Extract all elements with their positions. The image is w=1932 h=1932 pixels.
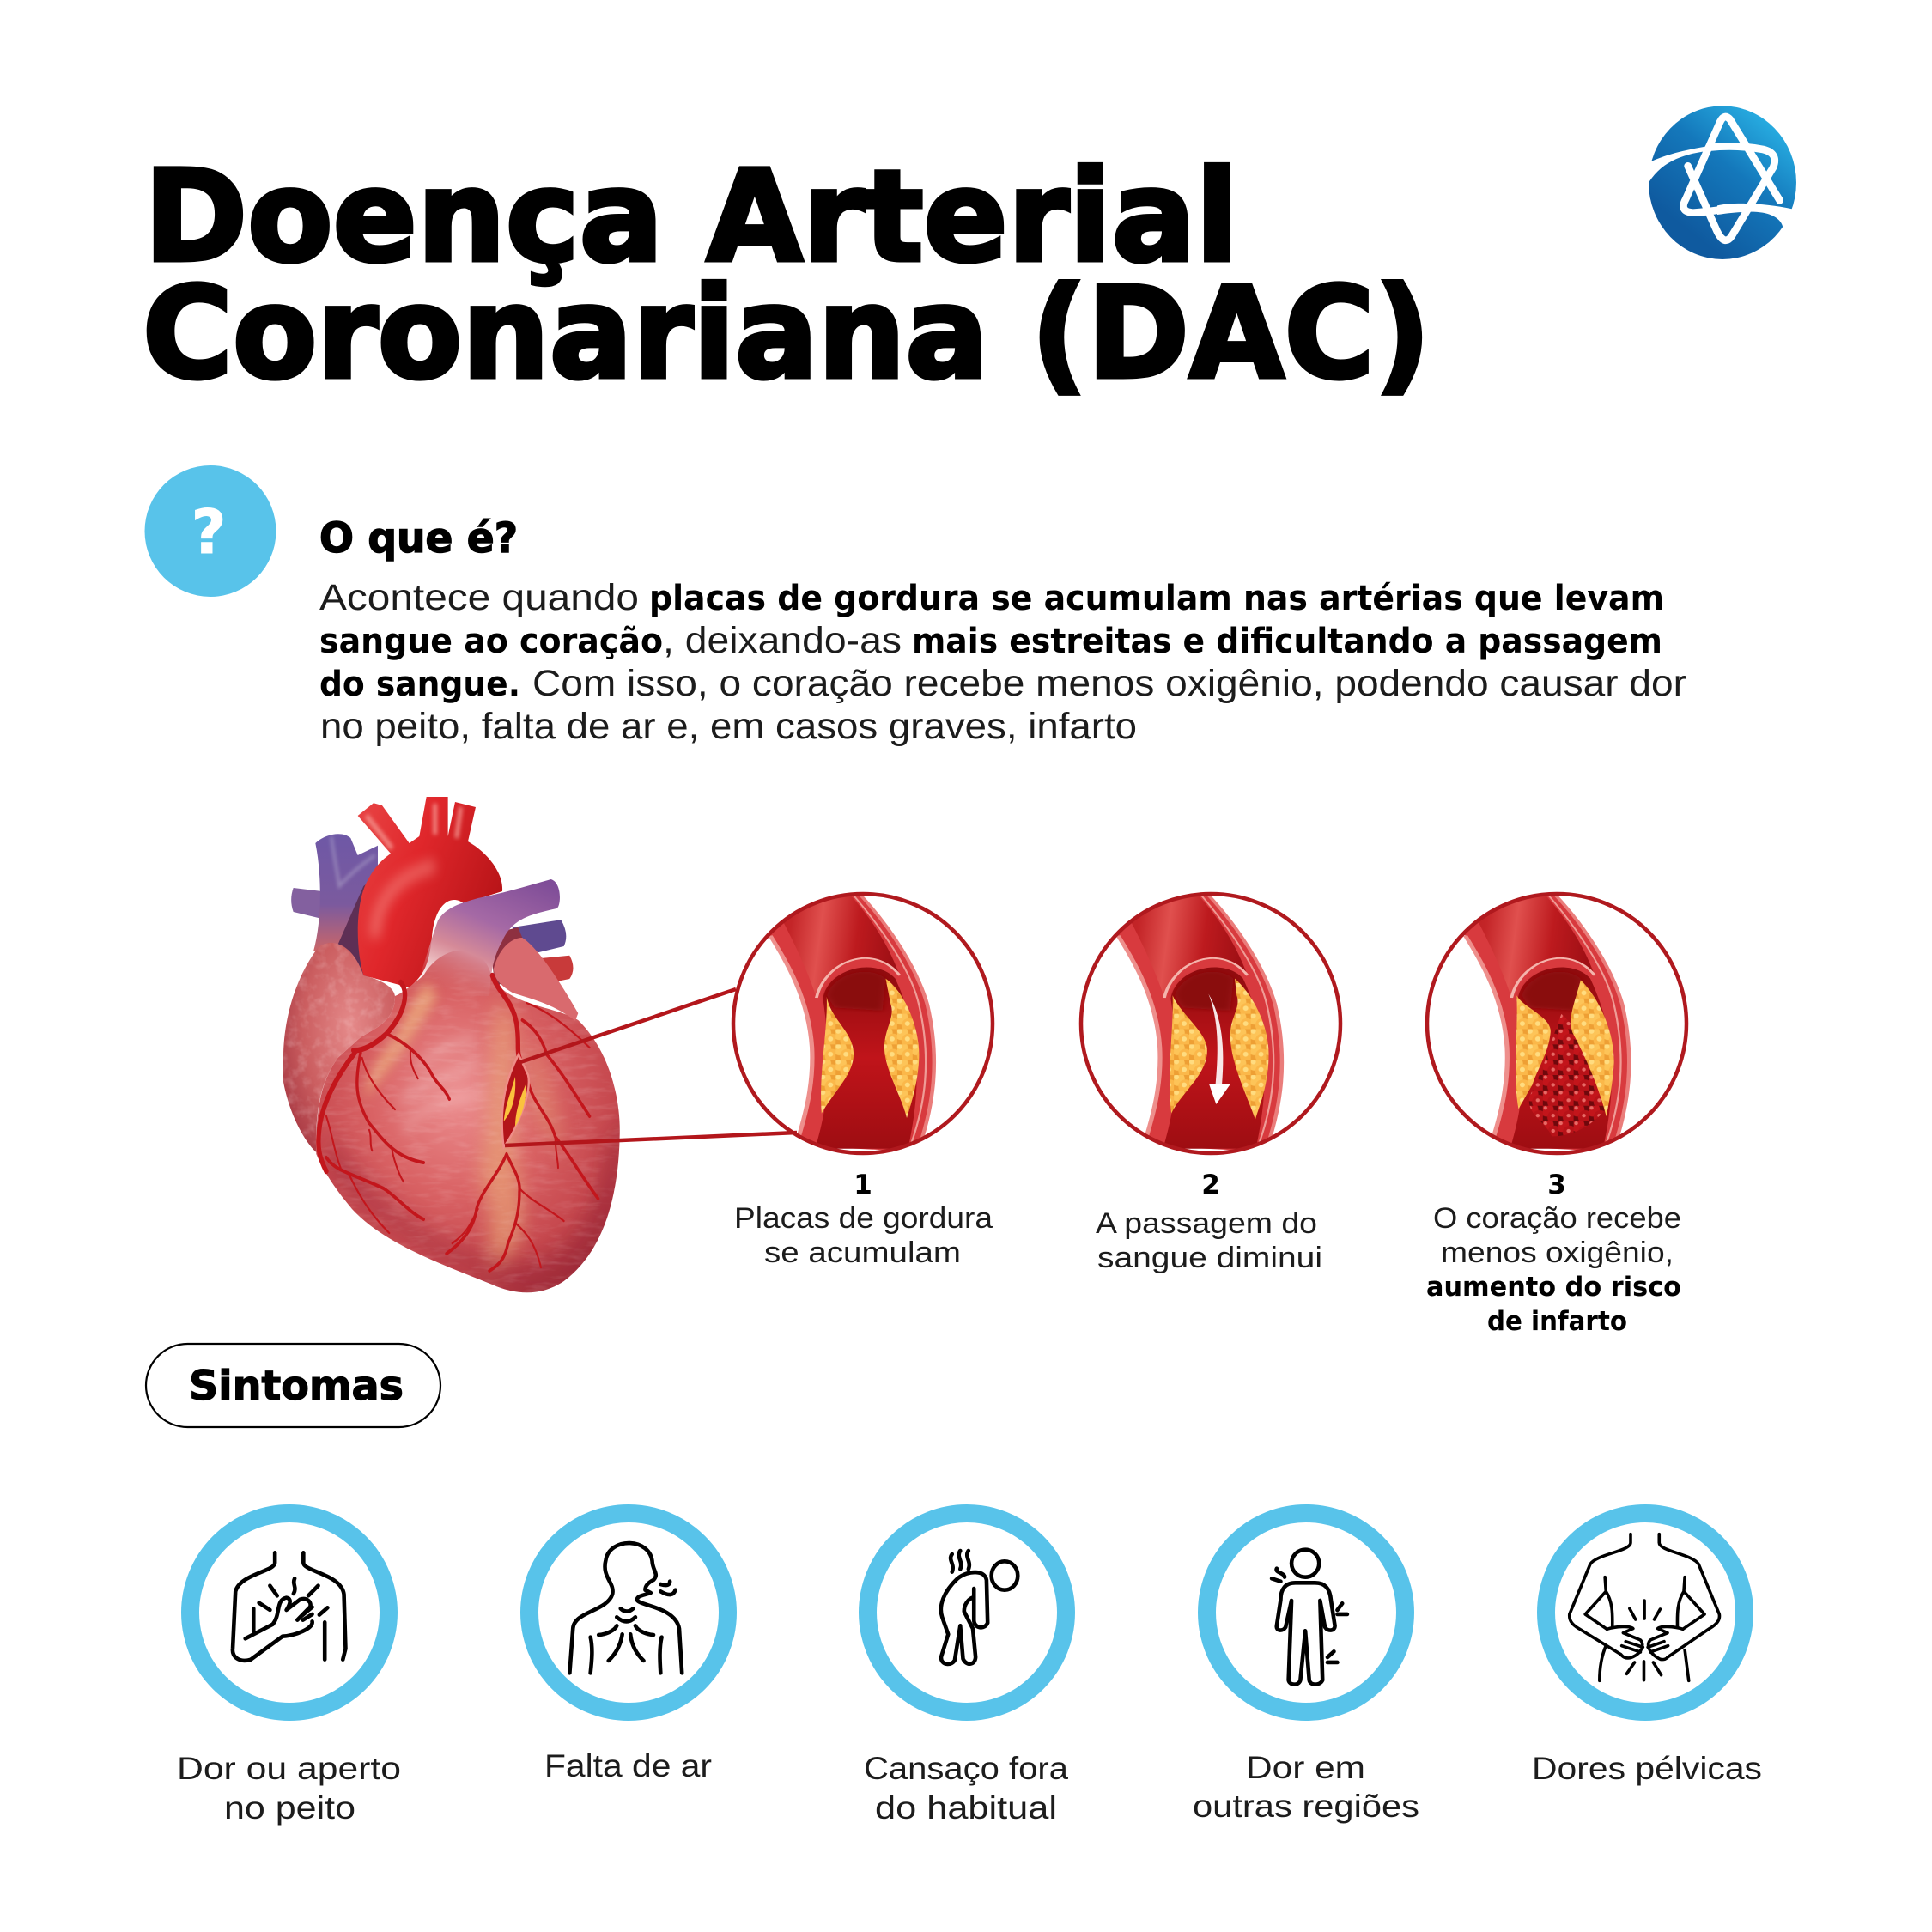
caption 2: 2	[1201, 1170, 1220, 1200]
aorta highlights	[367, 804, 461, 938]
vessel: highlight on vena cava	[331, 836, 375, 886]
caption 2: A passagem do	[1096, 1207, 1317, 1240]
plaque left	[1170, 995, 1207, 1114]
vessel: red back vessel	[541, 956, 573, 982]
plaque right	[884, 979, 919, 1118]
coronary arteries	[319, 975, 598, 1271]
paragraph: definition: no peito, falta de ar e, em casos graves, infarto	[320, 707, 1137, 747]
symptom labels	[177, 1747, 1762, 1826]
plaque right	[1230, 979, 1269, 1120]
symptom 5: pelvic pain	[1546, 1513, 1745, 1712]
caption 1: 1	[854, 1170, 872, 1200]
paragraph: definition: sangue ao coração	[319, 622, 663, 661]
caption 1	[734, 1170, 993, 1269]
caption 2: sangue diminui	[1097, 1242, 1322, 1274]
symptom labels: no peito	[224, 1789, 355, 1826]
caption 2	[1096, 1170, 1322, 1274]
atrium texture	[283, 943, 393, 1151]
symptom 4: pain elsewhere	[1207, 1513, 1405, 1712]
title: Coronariana (DAC)	[143, 260, 1431, 407]
plaque left	[821, 997, 854, 1114]
paragraph: definition	[319, 578, 1686, 747]
symptom 1: chest pain	[191, 1513, 388, 1712]
symptom 2: shortness of breath	[529, 1513, 728, 1712]
vessel: pulmonary artery	[412, 879, 560, 996]
plaque right	[1571, 980, 1614, 1116]
symptom labels: Falta de ar	[544, 1747, 712, 1783]
vessel: dark filling behind auricle	[489, 927, 530, 989]
artery circle 3: clot and higher infarction risk	[1427, 882, 1686, 1153]
vessel: aorta	[358, 797, 502, 987]
icon: question mark circle: ?	[191, 497, 226, 568]
callout lines from heart to circle 1	[505, 989, 797, 1145]
heading: O que é?: O que é?	[319, 514, 518, 562]
artery circle 1: plaque build-up	[733, 882, 993, 1153]
arrow: blood flow	[1208, 993, 1230, 1104]
plaque left	[1516, 995, 1551, 1109]
paragraph: definition: , deixando-as	[663, 621, 902, 661]
caption 3: aumento do risco	[1426, 1272, 1681, 1303]
paragraph: definition: Com isso, o coração recebe menos oxigênio, podendo causar dor	[532, 664, 1686, 704]
symptom labels: Dor ou aperto	[177, 1750, 401, 1786]
vessel: superior vena cava	[313, 834, 378, 951]
heart: right atrium	[283, 943, 395, 1152]
paragraph: definition: placas de gordura se acumulam nas artérias que levam	[649, 579, 1664, 618]
symptom labels: do habitual	[875, 1789, 1057, 1826]
caption 3	[1426, 1170, 1681, 1337]
paragraph: definition: do sangue.	[319, 665, 520, 704]
heart: left auricle	[494, 938, 578, 1021]
logo: blue globe with star	[1640, 106, 1799, 259]
illustration: heart	[281, 797, 624, 1298]
section pill: Sintomas: Sintomas	[189, 1363, 404, 1410]
section pill: Sintomas	[146, 1344, 440, 1427]
vessel: small left vein	[291, 888, 322, 919]
caption 1: se acumulam	[764, 1236, 961, 1269]
icon: tired bent figure	[941, 1551, 1018, 1664]
caption 3: menos oxigênio,	[1441, 1236, 1674, 1269]
caption 3: 3	[1547, 1170, 1566, 1200]
icon: hands on pelvis	[1570, 1534, 1719, 1680]
artery circle 2: reduced blood flow	[1081, 882, 1340, 1153]
icon: torso breathing	[569, 1543, 682, 1673]
vessel: right back veins	[513, 920, 566, 953]
clot	[1529, 1014, 1607, 1136]
symptom labels: Cansaço fora	[864, 1750, 1068, 1786]
caption 3: O coração recebe	[1433, 1202, 1681, 1235]
paragraph: definition: mais estreitas e dificultando a passagem	[912, 622, 1662, 661]
title: Doença Arterial	[144, 143, 1238, 290]
symptom 3: unusual fatigue	[867, 1513, 1066, 1712]
coronary opening with plaque	[502, 1054, 529, 1147]
title	[143, 143, 1431, 407]
caption 3: de infarto	[1487, 1306, 1627, 1337]
symptom labels: Dores pélvicas	[1532, 1750, 1762, 1786]
symptom labels: outras regiões	[1193, 1788, 1419, 1824]
caption 1: Placas de gordura	[734, 1202, 993, 1235]
heart: fat bands, shading and muscle texture	[315, 938, 624, 1298]
icon: standing figure	[1272, 1550, 1347, 1685]
symptom labels: Dor em	[1246, 1749, 1365, 1785]
paragraph: definition: Acontece quando	[319, 578, 639, 618]
icon: question mark circle	[144, 465, 276, 597]
vessel: dark back filling	[335, 872, 380, 982]
heart main body	[316, 950, 620, 1292]
icon: hand on chest	[233, 1552, 345, 1661]
